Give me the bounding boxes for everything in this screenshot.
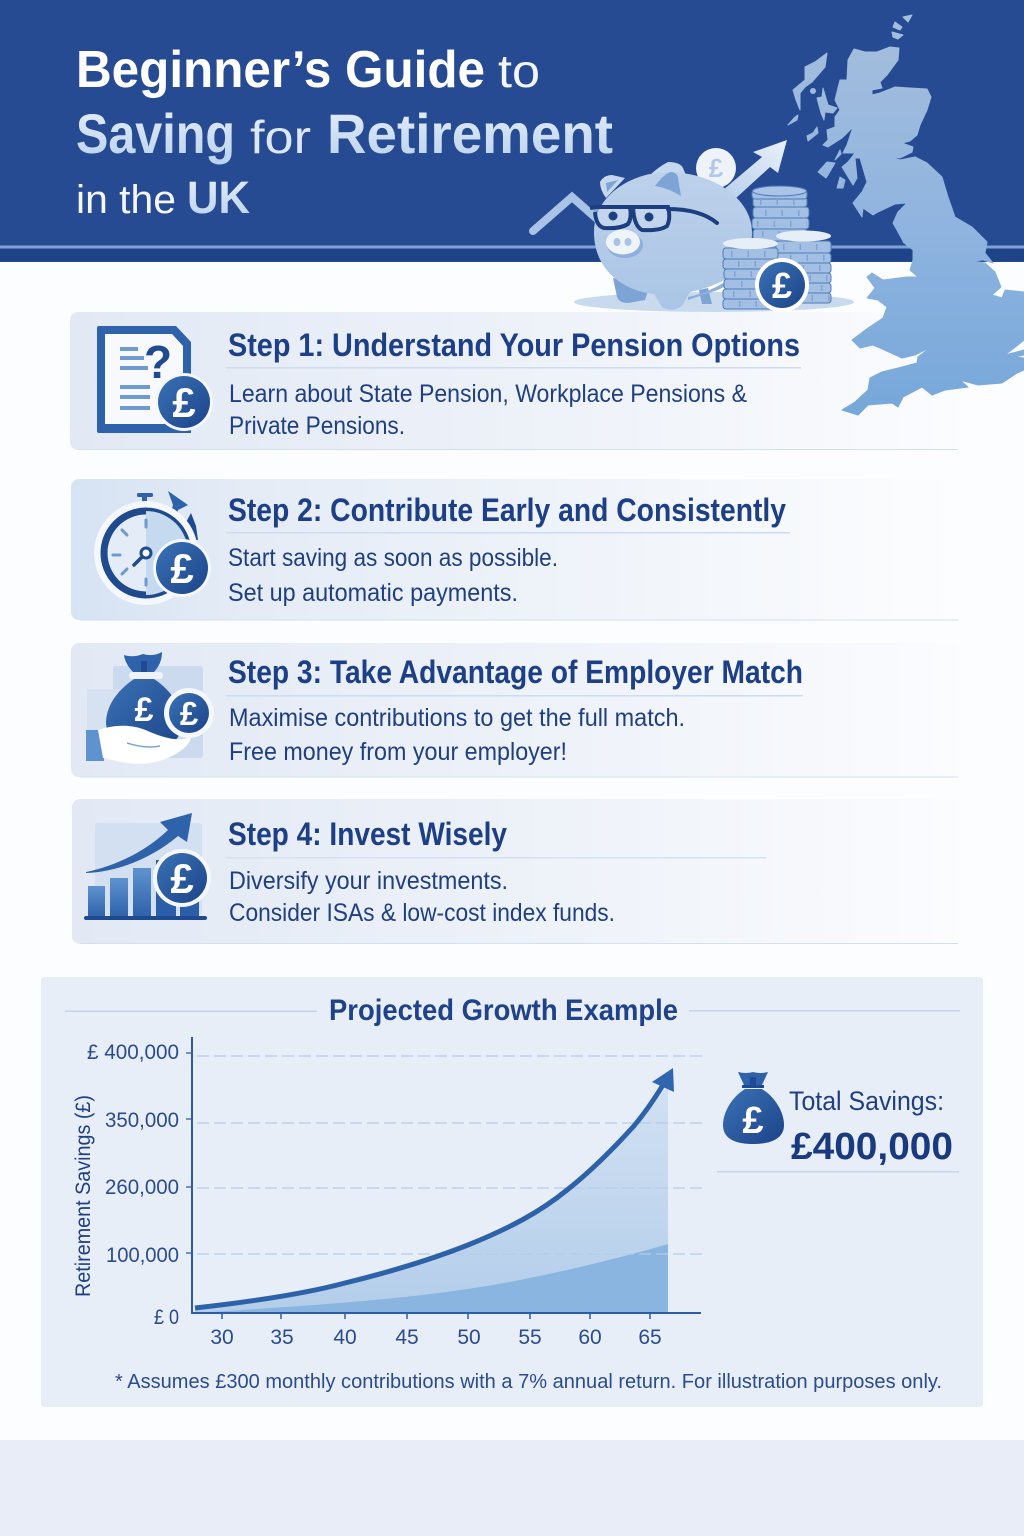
callout: total savings: Total Savings: [789,1086,944,1116]
icon: pension document: £ [172,379,196,426]
coin stack: left [723,238,778,309]
callout: total savings [717,1072,959,1172]
mainland Great Britain [823,47,1024,415]
y axis title: Retirement Savings (£) [72,1095,95,1297]
panel: projected growth [41,977,983,1407]
gridlines [197,1056,702,1254]
step 4 heading: Step 4: Invest Wisely [228,816,507,852]
step 3 text: Free money from your employer! [229,738,567,766]
title: Retirement [327,102,613,165]
coin stack: back [752,186,809,241]
chart heading: Projected Growth Example [329,994,678,1027]
panel: step 1 [70,312,958,450]
rising arrow [723,140,787,199]
y axis labels: 100,000 [106,1244,179,1267]
y axis labels [87,1041,179,1329]
step 1 card [70,312,958,450]
axes [186,1037,701,1319]
large pound coin: £ [772,265,792,306]
icon: money bag in hand: £ [180,695,199,732]
step 1 text: Learn about State Pension, Workplace Pensions & [229,380,747,408]
islands [793,53,827,110]
bottom band [0,1440,1024,1536]
icon: bar chart with arrow and coin [84,813,211,920]
x axis labels: 50 [457,1326,481,1349]
step 2 text: Start saving as soon as possible. [228,544,558,572]
x axis labels: 45 [395,1326,419,1349]
icon: money bag [723,1072,784,1144]
coin stack: right [776,230,831,303]
ground shadow [574,292,854,312]
y axis labels: 260,000 [105,1176,179,1199]
panel: step 2 [71,479,958,620]
step 2 heading: Step 2: Contribute Early and Consistently [228,492,786,528]
y axis labels: £ 0 [154,1306,179,1329]
x axis labels: 60 [578,1326,602,1349]
zigzag growth line [533,197,605,231]
title: to [498,45,540,97]
step 2 text [228,544,558,607]
x axis labels: 30 [210,1326,234,1349]
x axis labels: 35 [270,1326,294,1349]
glasses [590,207,717,230]
step 4 text: Diversify your investments. [229,867,508,895]
title: Saving [76,102,235,165]
step 3 text: Maximise contributions to get the full match. [229,704,685,732]
body [594,172,752,310]
snout [606,230,643,258]
icon: bar chart with arrow and coin: £ [170,855,194,902]
icon: stopwatch with coin: £ [170,545,194,592]
floating pound coin [696,148,736,188]
piggy bank [590,162,752,310]
panel: step 3 [71,643,958,778]
growth curve with arrow [195,1068,674,1308]
large pound coin [755,258,809,312]
icon: pension document [97,326,213,433]
panel: step 4 [72,799,958,944]
header banner [0,0,1024,262]
illustration: piggy bank with coins and arrows [533,140,854,312]
step 4 card [72,799,958,944]
step 4 text [229,867,615,927]
x axis labels: 65 [638,1326,662,1349]
title: UK [187,172,250,223]
title: in the [76,178,176,222]
step 3 card [71,643,958,778]
title: Beginner’s Guide [76,41,485,99]
callout: total savings: £400,000 [791,1126,953,1168]
step 3 text [229,704,685,766]
UK map [788,15,1024,415]
line chart [72,1037,702,1349]
step 2 card [71,479,958,620]
area: total savings [195,1085,668,1313]
icon: pension document: ? [144,336,172,388]
icon: money bag in hand: £ [135,691,154,729]
x axis labels: 40 [333,1326,357,1349]
title [76,41,613,223]
area: contributions [195,1244,668,1313]
step 1 text [229,380,747,440]
x axis labels [210,1326,662,1349]
y axis labels: 350,000 [105,1109,179,1132]
x axis labels: 55 [518,1326,542,1349]
step 4 text: Consider ISAs & low-cost index funds. [229,899,615,927]
icon: money bag in hand [86,652,214,764]
step 2 text: Set up automatic payments. [228,579,518,607]
step 3 heading: Step 3: Take Advantage of Employer Match [228,654,803,690]
footnote: * Assumes £300 monthly contributions with a 7% annual return. For illustration purposes only. [115,1370,942,1393]
floating pound coin: £ [709,153,724,183]
icon: stopwatch with coin [94,491,211,605]
y axis labels: £ 400,000 [87,1041,179,1064]
back legs [613,278,650,303]
ears [600,175,625,198]
icon: money bag: £ [742,1100,764,1142]
step 1 text: Private Pensions. [229,412,405,440]
title: for [250,111,311,163]
step 1 heading: Step 1: Understand Your Pension Options [228,327,800,363]
